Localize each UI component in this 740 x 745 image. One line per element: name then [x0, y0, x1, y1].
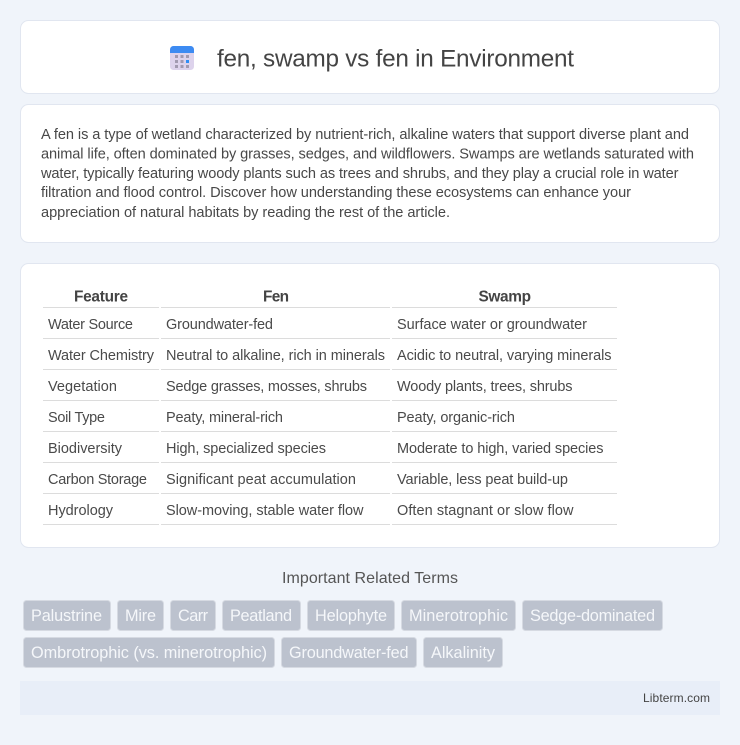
table row: biodiversity: Moderate to high, varied species: [397, 441, 604, 457]
tag: Groundwater-fed: Groundwater-fed: [289, 644, 408, 662]
table row: carbon storage: Carbon Storage: [48, 472, 147, 488]
tag: Alkalinity: [424, 638, 502, 668]
table row: water source: Surface water or groundwater: [397, 317, 587, 333]
table header row: Fen: [263, 288, 289, 306]
tag: Mire: [118, 600, 164, 630]
tag: Carr: [170, 600, 216, 630]
panel: description: [20, 104, 720, 242]
text block: description: animal life, often dominated by grasses, sedges, and wildflowers. Swamps are wetlands saturated with: [41, 146, 694, 162]
tag: Alkalinity: Alkalinity: [431, 644, 496, 662]
table header row: Swamp: [478, 288, 531, 306]
tag: Carr: Carr: [178, 607, 209, 625]
table row: water chemistry: Neutral to alkaline, rich in minerals: [166, 348, 385, 364]
tag: Helophyte: [308, 600, 394, 630]
table row: water source: Water Source: [48, 317, 133, 333]
tag: Minerotrophic: [402, 600, 516, 630]
footer: [20, 681, 720, 715]
tag: Sedge-dominated: Sedge-dominated: [530, 607, 655, 625]
table row: hydrology: [43, 503, 617, 525]
table row: soil type: [43, 410, 617, 432]
table row: soil type: Peaty, organic-rich: [397, 410, 515, 426]
table row: soil type: Soil Type: [48, 410, 105, 426]
tag: Helophyte: Helophyte: [315, 607, 387, 625]
table header row: [43, 288, 617, 308]
tag: Mire: Mire: [125, 607, 156, 625]
tag list: related terms: [24, 600, 662, 668]
heading: related terms: Important Related Terms: [282, 570, 458, 587]
tag: Sedge-dominated: [522, 600, 662, 630]
icon: calendar: [170, 46, 194, 70]
table row: carbon storage: [43, 472, 617, 494]
table row: carbon storage: Variable, less peat build-up: [397, 472, 568, 488]
table row: vegetation: Woody plants, trees, shrubs: [397, 379, 572, 395]
table row: hydrology: Slow-moving, stable water flow: [166, 503, 364, 519]
tag: Palustrine: Palustrine: [31, 607, 102, 625]
table row: hydrology: Often stagnant or slow flow: [397, 503, 574, 519]
panel: header: [20, 20, 720, 94]
panel: comparison table: [20, 264, 720, 548]
text block: description: [40, 127, 694, 221]
title: fen, swamp vs fen in Environment: [217, 46, 574, 72]
table row: biodiversity: [43, 441, 617, 463]
table row: carbon storage: Significant peat accumulation: [166, 472, 356, 488]
tag: Peatland: Peatland: [230, 607, 292, 625]
table header row: Feature: [74, 288, 128, 306]
tag: Ombrotrophic: Ombrotrophic (vs. minerotrophic): [31, 644, 267, 662]
tag: Minerotrophic: Minerotrophic: [409, 607, 508, 625]
table row: hydrology: Hydrology: [48, 503, 114, 519]
tag: Groundwater-fed: [282, 638, 416, 668]
table row: water chemistry: Acidic to neutral, varying minerals: [397, 348, 612, 364]
table row: soil type: Peaty, mineral-rich: [166, 410, 283, 426]
tag: Ombrotrophic: [24, 638, 274, 668]
table row: water chemistry: [43, 348, 617, 370]
table row: water source: Groundwater-fed: [166, 317, 273, 333]
table row: water chemistry: Water Chemistry: [48, 348, 155, 364]
table row: vegetation: Vegetation: [48, 379, 117, 395]
table row: vegetation: [43, 379, 617, 401]
text block: description: filtration and flood control. Discover how understanding these ecosystems can enhance your: [41, 185, 631, 201]
text block: description: water, typically featuring woody plants such as trees and shrubs, and they play a crucial role in water: [40, 166, 679, 182]
table row: water source: [43, 317, 617, 339]
table row: biodiversity: High, specialized species: [166, 441, 326, 457]
tag: Peatland: [222, 600, 300, 630]
text block: description: A fen is a type of wetland characterized by nutrient-rich, alkaline waters that support diverse plant and: [41, 127, 689, 143]
table row: vegetation: Sedge grasses, mosses, shrubs: [166, 379, 367, 395]
tag: Palustrine: [24, 600, 110, 630]
text block: description: appreciation of natural habitats by reading the rest of the article.: [41, 205, 450, 221]
footer credit: Libterm.com: [643, 691, 710, 705]
table row: biodiversity: Biodiversity: [48, 441, 123, 457]
